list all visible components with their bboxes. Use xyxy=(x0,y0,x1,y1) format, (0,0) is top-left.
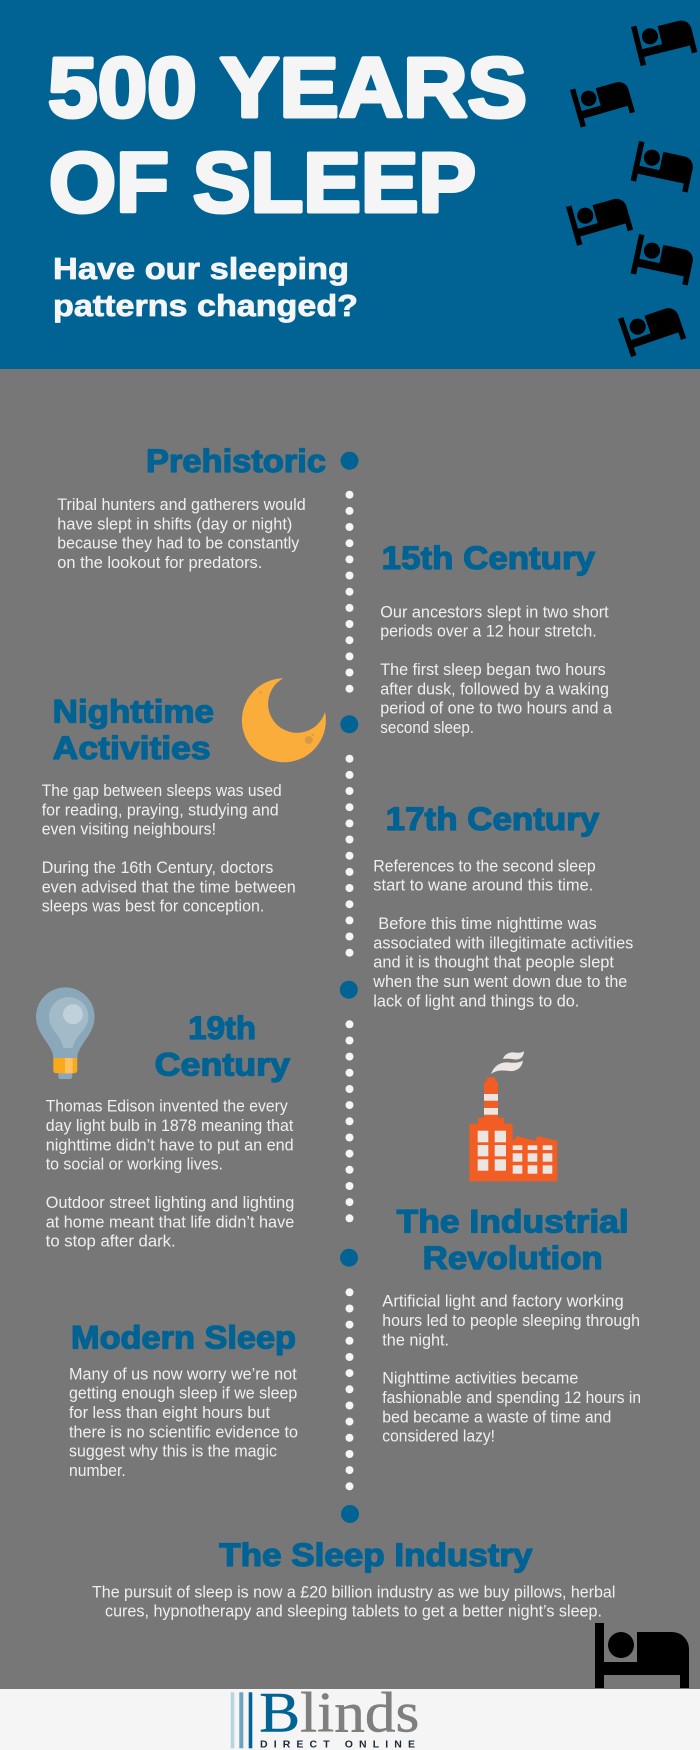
text: sleep industry body: cures, hypnotherapy and sleeping tablets to get a better night’s sleep. xyxy=(105,1603,602,1621)
panel: 17th century xyxy=(372,801,633,1010)
panel: nighttime activities xyxy=(42,678,326,916)
icon: bed xyxy=(595,1623,689,1688)
text: prehistoric body: on the lookout for predators. xyxy=(57,554,262,572)
text: 17th century body: associated with illegitimate activities xyxy=(373,934,633,952)
text: nighttime body: even advised that the time between xyxy=(42,878,296,896)
text: sleep industry body: The pursuit of sleep is now a £20 billion industry as we buy pillows, herbal xyxy=(92,1583,615,1601)
text: 17th century body: when the sun went down due to the xyxy=(372,973,627,991)
text: industrial revolution body: considered lazy! xyxy=(382,1428,495,1446)
text: prehistoric body: Tribal hunters and gatherers would xyxy=(57,496,306,514)
subtitle: Have our sleeping xyxy=(53,251,349,286)
panel: header xyxy=(0,0,700,369)
text: industrial revolution body: fashionable and spending 12 hours in xyxy=(382,1389,641,1407)
panel: 19th century xyxy=(36,987,294,1251)
text: 19th century body xyxy=(46,1098,294,1251)
heading: 15th century: 15th Century xyxy=(382,540,595,576)
heading: modern sleep: Modern Sleep xyxy=(71,1319,296,1355)
text: 17th century body: References to the second sleep xyxy=(373,857,596,875)
text: 15th century body: period of one to two hours and a xyxy=(380,700,613,718)
text: industrial revolution body: bed became a waste of time and xyxy=(382,1408,611,1426)
text: nighttime body: During the 16th Century, doctors xyxy=(42,859,273,877)
text: 15th century body: after dusk, followed by a waking xyxy=(380,680,609,698)
header background xyxy=(0,0,700,369)
text: 19th century body: at home meant that life didn’t have xyxy=(46,1213,294,1231)
heading: prehistoric: Prehistoric xyxy=(146,443,326,479)
text: nighttime body: sleeps was best for conception. xyxy=(42,898,264,916)
text: 15th century body xyxy=(380,603,613,737)
icon: falling beds xyxy=(566,13,697,357)
text: nighttime body: even visiting neighbours! xyxy=(42,821,216,839)
text: modern sleep body: number. xyxy=(69,1462,126,1480)
text: prehistoric body: because they had to be constantly xyxy=(57,535,300,553)
text: modern sleep body: suggest why this is the magic xyxy=(69,1443,277,1461)
heading: the sleep industry: The Sleep Industry xyxy=(219,1537,533,1573)
text: nighttime body: The gap between sleeps was used xyxy=(42,782,282,800)
text: 17th century body: start to wane around this time. xyxy=(373,877,593,895)
text: 17th century body xyxy=(372,857,633,1010)
text: modern sleep body xyxy=(69,1365,298,1480)
heading: 19th century: 19th xyxy=(188,1010,256,1046)
heading: 17th century: 17th Century xyxy=(386,801,600,837)
text: sleep industry body xyxy=(92,1583,615,1621)
icon: factory xyxy=(469,1051,557,1181)
icon: light bulb xyxy=(36,987,95,1079)
text: modern sleep body: there is no scientific evidence to xyxy=(69,1423,298,1441)
logo: Blinds Direct Online: Blinds xyxy=(259,1682,419,1745)
icon: moon xyxy=(242,678,326,762)
title: 500 YEARS xyxy=(48,40,527,134)
panel: prehistoric xyxy=(57,443,326,572)
text: prehistoric body xyxy=(57,496,306,572)
text: modern sleep body: getting enough sleep if we sleep xyxy=(69,1385,297,1403)
footer background xyxy=(0,1689,700,1750)
text: 17th century body: and it is thought that people slept xyxy=(373,954,614,972)
subtitle: patterns changed? xyxy=(53,288,358,323)
panel: the sleep industry xyxy=(92,1537,689,1688)
text: 19th century body: to stop after dark. xyxy=(46,1233,176,1251)
text: industrial revolution body xyxy=(382,1293,641,1446)
text: 19th century body: Outdoor street lighting and lighting xyxy=(46,1194,294,1212)
text: 17th century body: Before this time nighttime was xyxy=(378,915,597,933)
heading: industrial revolution: Revolution xyxy=(423,1240,603,1276)
heading: 19th century: Century xyxy=(155,1047,290,1083)
title: OF SLEEP xyxy=(49,136,476,230)
heading: nighttime activities: Nighttime xyxy=(53,693,214,729)
heading: 19th century xyxy=(155,1010,290,1083)
text: modern sleep body: for less than eight hours but xyxy=(69,1404,270,1422)
text: 19th century body: Thomas Edison invented the every xyxy=(46,1098,288,1116)
panel: 15th century xyxy=(380,540,613,737)
text: 19th century body: to social or working lives. xyxy=(46,1156,223,1174)
text: 17th century body: lack of light and things to do. xyxy=(373,992,579,1010)
text: industrial revolution body: Nighttime activities became xyxy=(382,1370,578,1388)
text: 19th century body: nighttime didn’t have to put an end xyxy=(46,1136,294,1154)
text: industrial revolution body: Artificial light and factory working xyxy=(382,1293,624,1311)
text: industrial revolution body: hours led to people sleeping through xyxy=(382,1312,640,1330)
text: nighttime body: for reading, praying, studying and xyxy=(42,801,279,819)
title xyxy=(48,40,527,230)
text: 15th century body: Our ancestors slept in two short xyxy=(380,603,609,621)
timeline xyxy=(340,452,359,1523)
heading: nighttime activities: Activities xyxy=(53,730,211,766)
text: 15th century body: periods over a 12 hour stretch. xyxy=(380,623,597,641)
panel: footer xyxy=(0,1682,700,1750)
text: nighttime body xyxy=(42,782,296,916)
heading: nighttime activities xyxy=(53,693,214,766)
panel: page background xyxy=(0,369,700,1689)
heading: industrial revolution xyxy=(397,1203,629,1276)
subtitle xyxy=(53,251,358,323)
text: modern sleep body: Many of us now worry we’re not xyxy=(69,1365,297,1383)
text: 15th century body: The first sleep began two hours xyxy=(380,661,606,679)
text: 19th century body: day light bulb in 1878 meaning that xyxy=(46,1117,294,1135)
text: prehistoric body: have slept in shifts (day or night) xyxy=(57,515,292,533)
panel: industrial revolution xyxy=(382,1051,641,1446)
heading: industrial revolution: The Industrial xyxy=(397,1203,629,1239)
text: 15th century body: second sleep. xyxy=(380,719,474,737)
panel: modern sleep xyxy=(69,1319,298,1480)
text: industrial revolution body: the night. xyxy=(382,1331,449,1349)
